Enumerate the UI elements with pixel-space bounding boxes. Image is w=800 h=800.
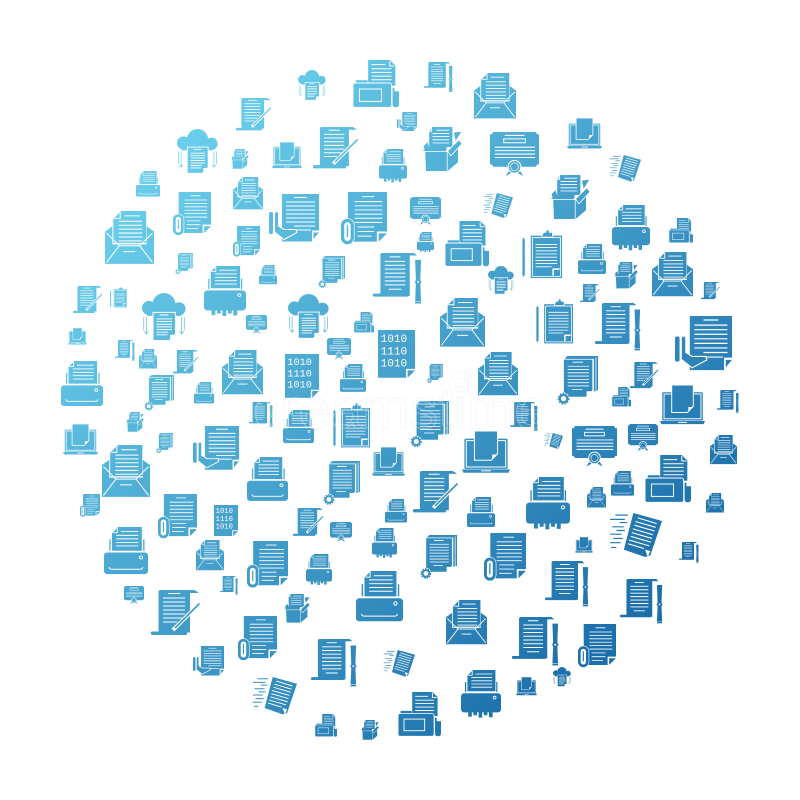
icon: envelope letter bbox=[587, 487, 606, 508]
icon: printer bbox=[578, 244, 606, 274]
icon: printer bbox=[356, 571, 403, 621]
icon: certificate bbox=[246, 315, 267, 334]
icon: shredder bbox=[379, 149, 407, 182]
icon: flying document bbox=[610, 155, 641, 182]
icon: fax folder bbox=[354, 312, 374, 333]
icon: binary document: 1110 bbox=[216, 516, 233, 524]
icon: certificate bbox=[410, 197, 441, 225]
icon: shredder bbox=[306, 554, 332, 585]
icon: signed scroll bbox=[580, 284, 600, 302]
icon: diploma scroll bbox=[249, 402, 273, 427]
icon: diploma scroll bbox=[595, 303, 641, 350]
icon: certificate bbox=[124, 586, 144, 604]
icon: envelope letter bbox=[478, 352, 518, 395]
icon: laptop document bbox=[516, 677, 537, 695]
icon: envelope letter bbox=[446, 600, 487, 644]
icon: signed scroll bbox=[630, 362, 658, 388]
icon: binary document: 1010 bbox=[287, 358, 312, 369]
icon: binary document bbox=[378, 330, 415, 378]
icon: laptop document bbox=[462, 431, 510, 473]
icon: fax folder bbox=[612, 387, 631, 407]
icon: signed scroll bbox=[413, 471, 458, 512]
icon: cloud document bbox=[177, 129, 218, 173]
icon: printer bbox=[259, 265, 277, 284]
icon: flying document bbox=[253, 677, 297, 714]
icon: envelope letter bbox=[196, 540, 224, 570]
icon: envelope letter bbox=[652, 252, 693, 296]
icon: diploma scroll bbox=[311, 639, 357, 686]
icon: printer bbox=[340, 364, 366, 392]
icon: diploma scroll bbox=[679, 542, 699, 563]
icon: cloud document bbox=[298, 70, 326, 100]
icon: document box bbox=[285, 594, 310, 623]
icon: printer bbox=[136, 171, 160, 197]
icon: shredder bbox=[372, 528, 397, 558]
icon: printer bbox=[467, 497, 495, 527]
icon: binary document bbox=[214, 505, 238, 536]
icon: document settings bbox=[420, 535, 457, 579]
icon: envelope letter bbox=[706, 493, 724, 512]
icon: binary document: 1010 bbox=[381, 358, 407, 370]
icon: document box bbox=[614, 262, 638, 288]
icon: diploma scroll bbox=[620, 579, 663, 623]
icon: diploma scroll bbox=[510, 402, 538, 431]
icon: certificate bbox=[628, 424, 658, 451]
icon: document box bbox=[423, 127, 462, 171]
icon: printer bbox=[611, 471, 634, 496]
icon: certificate bbox=[490, 132, 539, 176]
icon: printer bbox=[247, 457, 288, 501]
icon: fax folder bbox=[669, 218, 693, 243]
icon: paperclip document bbox=[239, 616, 277, 659]
icon: document settings bbox=[410, 401, 449, 447]
icon: laptop document bbox=[272, 142, 302, 168]
icon: laptop document bbox=[575, 537, 593, 553]
icon: diploma scroll bbox=[512, 617, 559, 665]
icon: shredder bbox=[612, 205, 650, 250]
icon: flying document bbox=[610, 513, 662, 557]
icon: laptop document bbox=[660, 385, 705, 424]
icon: paperclip document bbox=[248, 541, 288, 586]
icon: envelope letter bbox=[440, 298, 485, 347]
icon: binary document: 1010 bbox=[381, 334, 407, 346]
watermark: dreamstime bbox=[248, 377, 546, 441]
icon: document box bbox=[361, 720, 379, 740]
icon: paperclip document bbox=[485, 533, 526, 579]
icon: cloud document bbox=[288, 294, 329, 338]
icon: paperclip document bbox=[174, 192, 211, 234]
icon: shredder bbox=[526, 477, 570, 529]
icon: binary document bbox=[285, 354, 319, 398]
icon: diploma scroll bbox=[115, 340, 135, 361]
icon: envelope letter bbox=[710, 435, 737, 464]
icon: flying document bbox=[384, 650, 415, 677]
icon: clipboard bbox=[333, 403, 370, 447]
icon: certificate bbox=[330, 522, 352, 542]
icon: binary document: 1110 bbox=[381, 346, 407, 358]
icon: shredder bbox=[461, 670, 501, 718]
icon: hand document bbox=[675, 316, 732, 370]
icon: shredder bbox=[204, 266, 246, 316]
icon: document settings bbox=[557, 356, 598, 405]
icon: fax folder bbox=[315, 714, 337, 737]
icon: document box bbox=[231, 149, 249, 169]
icon: paperclip document bbox=[159, 494, 197, 537]
icon: signed scroll bbox=[236, 98, 271, 130]
icon: hand document bbox=[193, 426, 239, 470]
icon: flying document bbox=[484, 193, 513, 218]
icon cluster: circle of document icons bbox=[61, 60, 739, 740]
icon: signed scroll bbox=[293, 508, 323, 536]
icon: laptop document bbox=[63, 424, 98, 454]
icon: paperclip document bbox=[343, 192, 387, 243]
icon: printer bbox=[385, 499, 407, 523]
icon: diploma scroll bbox=[424, 62, 453, 92]
icon: document settings bbox=[156, 433, 173, 453]
icon: paperclip document bbox=[579, 624, 616, 666]
icon: cloud document bbox=[553, 667, 571, 686]
icon: document settings bbox=[144, 375, 174, 411]
icon: envelope letter bbox=[474, 73, 516, 118]
icon: certificate bbox=[327, 338, 351, 360]
icon: envelope letter bbox=[102, 445, 150, 497]
icon: document settings bbox=[427, 364, 443, 383]
icon: hand document bbox=[397, 112, 417, 131]
icon: diploma scroll bbox=[545, 561, 589, 606]
icon: hand document bbox=[193, 646, 224, 675]
icon: signed scroll bbox=[73, 286, 102, 313]
icon: clipboard bbox=[110, 287, 127, 307]
icon: clipboard bbox=[522, 230, 562, 278]
icon: hand document bbox=[269, 194, 319, 242]
icon: laptop document bbox=[68, 328, 87, 345]
icon: certificate bbox=[572, 426, 617, 466]
icon: printer bbox=[194, 382, 214, 403]
icon: diploma scroll bbox=[220, 576, 238, 595]
icon: document settings bbox=[323, 461, 360, 505]
icon: cloud document bbox=[488, 266, 514, 294]
icon: document settings bbox=[318, 256, 345, 288]
icon: envelope letter bbox=[222, 350, 263, 394]
icon: paperclip document bbox=[234, 226, 260, 256]
icon: fax folder bbox=[445, 221, 489, 266]
icon: binary document: 1010 bbox=[287, 380, 312, 391]
icon: document settings bbox=[175, 253, 193, 274]
icon: laptop document bbox=[567, 118, 602, 148]
icon: signed scroll bbox=[173, 350, 198, 373]
icon: cloud document bbox=[142, 293, 186, 341]
icon: shredder bbox=[417, 232, 434, 252]
icon: laptop document bbox=[372, 447, 405, 476]
icon: fax folder bbox=[353, 60, 399, 107]
icon: diploma scroll bbox=[373, 253, 422, 303]
icon: signed scroll bbox=[701, 282, 720, 299]
icon: binary document: 1110 bbox=[287, 369, 312, 380]
icon: printer bbox=[104, 527, 148, 574]
icon: printer bbox=[61, 361, 103, 406]
icon: envelope letter bbox=[233, 177, 263, 209]
icon: signed scroll bbox=[313, 127, 358, 168]
icon: diploma scroll bbox=[717, 390, 739, 413]
icon: fax folder bbox=[398, 692, 441, 736]
icon: binary document: 1010 bbox=[216, 508, 233, 516]
icon: signed scroll bbox=[151, 590, 200, 635]
icon: binary document: 1010 bbox=[216, 524, 233, 532]
icon: envelope letter bbox=[105, 211, 154, 264]
icon: document box bbox=[551, 175, 590, 219]
icon: printer bbox=[283, 410, 314, 443]
icon: flying document bbox=[544, 433, 563, 449]
icon: fax folder bbox=[645, 455, 691, 502]
icon: clipboard bbox=[536, 299, 573, 343]
icon: paperclip document bbox=[81, 494, 100, 516]
icon: envelope letter bbox=[139, 349, 157, 368]
icon: document box bbox=[126, 412, 144, 432]
